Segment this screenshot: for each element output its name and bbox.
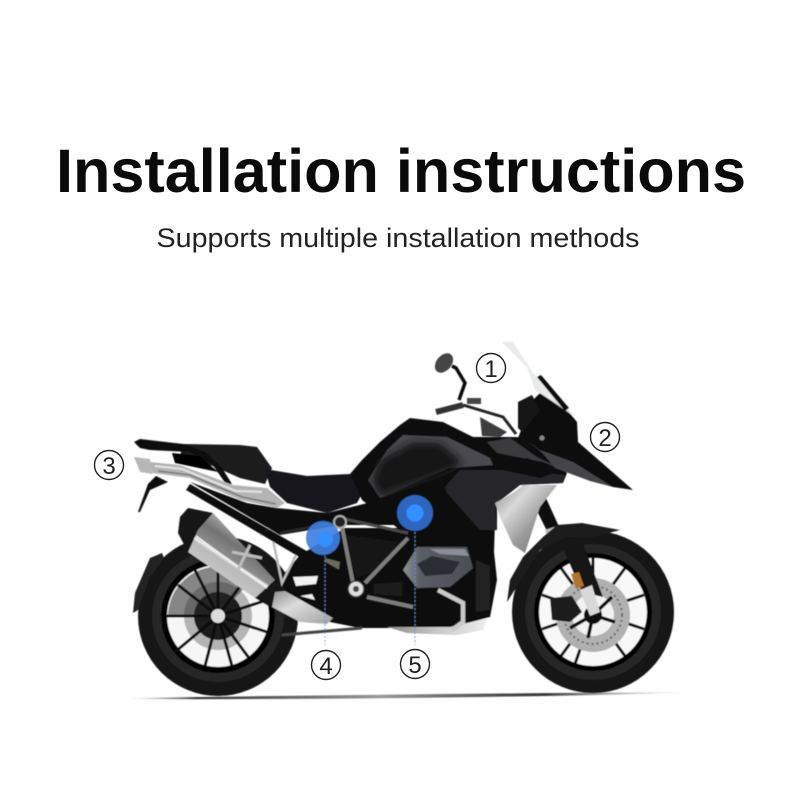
under-seat body bbox=[190, 482, 410, 535]
callout 5: 5 bbox=[408, 652, 422, 679]
fuel tank and body bbox=[350, 418, 570, 535]
marker line 5 bbox=[414, 532, 416, 645]
front fender bbox=[507, 523, 620, 602]
frame pivots bbox=[334, 516, 364, 597]
frame tubes bbox=[280, 518, 413, 635]
front seat bbox=[265, 469, 363, 513]
blue marker 5 bbox=[397, 495, 433, 531]
callout 2: 2 bbox=[598, 425, 612, 452]
silver pannier rail bbox=[150, 462, 285, 508]
ground shadow bbox=[130, 692, 683, 699]
title: Installation instructions bbox=[56, 137, 746, 205]
frame gaps and engine details bbox=[293, 535, 490, 612]
callout 3: 3 bbox=[102, 453, 116, 480]
exhaust header and bash plate bbox=[387, 590, 488, 635]
blue marker 4 bbox=[306, 521, 340, 555]
engine cylinder bbox=[403, 547, 473, 588]
engine and frame mass bbox=[283, 520, 497, 628]
tail light and licence holder bbox=[134, 457, 168, 512]
mirror and handlebar bbox=[431, 350, 540, 437]
callout 4: 4 bbox=[319, 653, 333, 680]
fork bbox=[534, 498, 603, 616]
callout 2 bbox=[590, 422, 620, 452]
muffler bbox=[178, 508, 333, 624]
callout 1: 1 bbox=[484, 356, 498, 383]
callout 5 bbox=[400, 650, 430, 679]
callout 4 bbox=[312, 650, 340, 680]
subtitle: Supports multiple installation methods bbox=[156, 223, 640, 253]
rear subframe strut bbox=[186, 484, 350, 584]
front wheel bbox=[512, 531, 674, 693]
callout 1 bbox=[476, 354, 506, 383]
rear hugger bbox=[133, 553, 164, 613]
silver side panel bbox=[495, 485, 557, 553]
front beak fairing bbox=[518, 393, 633, 490]
rear seat and grab rail bbox=[134, 439, 272, 484]
exhaust bracket bbox=[260, 528, 297, 583]
marker line 4 bbox=[324, 556, 326, 645]
callout 3 bbox=[94, 450, 124, 480]
rear wheel bbox=[138, 536, 298, 696]
windscreen bbox=[502, 342, 575, 417]
motorcycle illustration bbox=[130, 342, 683, 699]
